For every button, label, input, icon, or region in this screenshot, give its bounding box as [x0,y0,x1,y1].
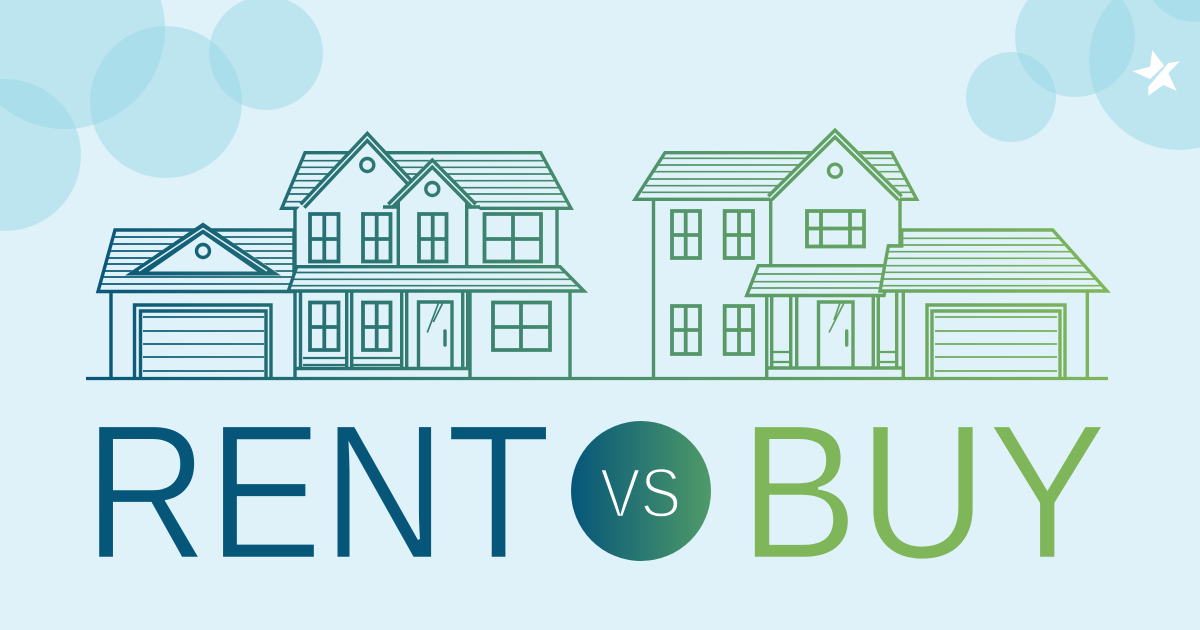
upper roof [635,153,917,199]
garage gable [125,222,281,276]
lower side windows [672,306,753,354]
garage roof [98,230,294,292]
title word: RENT: RENT [84,384,551,599]
porch roof [288,267,584,291]
garage roof [880,230,1107,291]
main upper walls [295,208,557,267]
ground line [86,377,1108,380]
small gable [382,157,480,267]
title word: BUY: BUY [739,384,1107,599]
icon: white star logo [1133,50,1180,96]
bubbles: top left [0,0,323,231]
garage door [927,305,1065,378]
badge: VS circle [571,421,711,561]
main gable [297,131,413,210]
porch columns [767,291,1087,378]
house: right owned house [635,127,1107,378]
central gable [770,127,900,266]
bubbles: top right [966,0,1200,150]
main roof [282,153,571,208]
lower windows [303,302,550,365]
garage door [134,305,271,378]
tower walls [652,199,655,378]
porch rails [772,352,896,362]
porch and lower walls [295,291,570,378]
upper windows [310,214,541,262]
front door [818,302,853,368]
badge: VS circle: VS [600,454,681,532]
upper windows [672,211,864,258]
porch roof [747,266,890,296]
house: left rental house [98,131,584,378]
garage walls [109,291,113,378]
front door [418,302,452,368]
